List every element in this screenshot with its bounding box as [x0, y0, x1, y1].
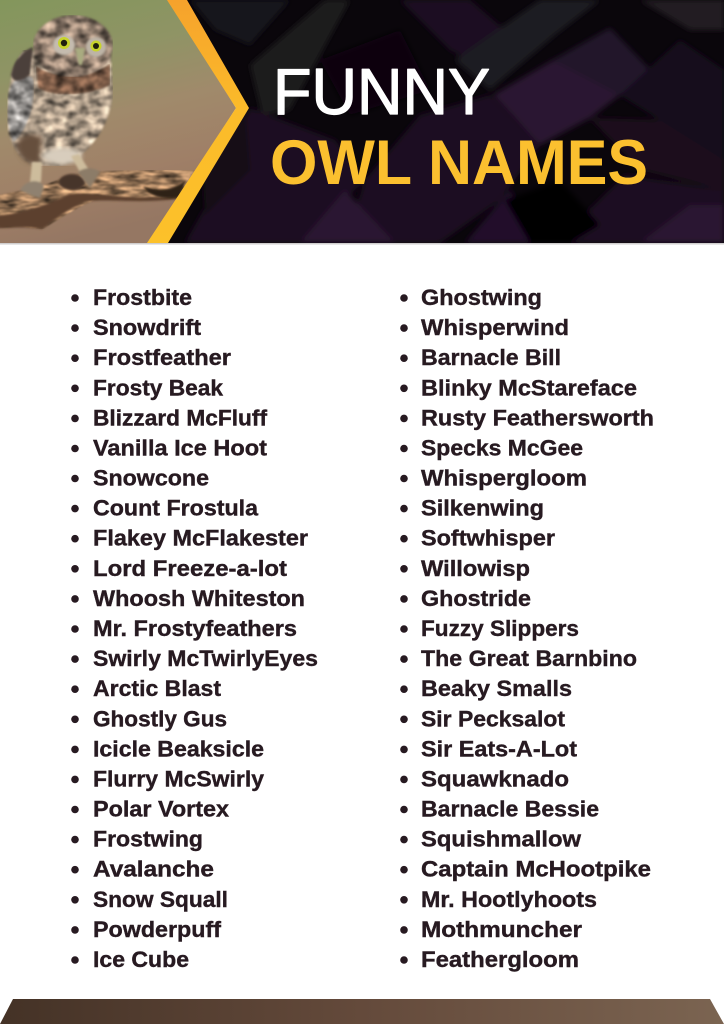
- name: Frostbite: Frostbite: [93, 285, 192, 310]
- header bottom edge: [0, 243, 724, 244]
- name: Ghostwing: Ghostwing: [421, 285, 542, 310]
- name: Blizzard McFluff: Blizzard McFluff: [93, 405, 268, 430]
- name: Flakey McFlakester: Flakey McFlakester: [93, 526, 308, 551]
- name: Ghostride: Ghostride: [421, 586, 531, 611]
- name: Silkenwing: Silkenwing: [421, 496, 544, 521]
- icon: branch: [0, 170, 195, 229]
- name: Swirly McTwirlyEyes: Swirly McTwirlyEyes: [93, 646, 318, 671]
- name: Count Frostula: Count Frostula: [93, 496, 259, 521]
- owl legs and feet: [20, 154, 100, 198]
- name: Captain McHootpike: Captain McHootpike: [421, 857, 651, 882]
- name: Sir Eats-A-Lot: Sir Eats-A-Lot: [421, 736, 578, 761]
- name: Whoosh Whiteston: Whoosh Whiteston: [93, 586, 305, 611]
- name: Beaky Smalls: Beaky Smalls: [421, 676, 572, 701]
- name: Polar Vortex: Polar Vortex: [93, 796, 229, 822]
- name: Barnacle Bessie: Barnacle Bessie: [421, 796, 599, 822]
- name: Rusty Feathersworth: Rusty Feathersworth: [421, 405, 654, 430]
- name: Squishmallow: Squishmallow: [421, 827, 582, 852]
- name: Blinky McStareface: Blinky McStareface: [421, 375, 637, 400]
- name: Feathergloom: Feathergloom: [421, 947, 579, 972]
- name: Mr. Hootlyhoots: Mr. Hootlyhoots: [421, 887, 597, 912]
- name: Whisperwind: Whisperwind: [421, 315, 569, 340]
- name: The Great Barnbino: The Great Barnbino: [421, 646, 637, 671]
- name: Mothmuncher: Mothmuncher: [421, 917, 582, 942]
- name: Willowisp: Willowisp: [421, 556, 530, 581]
- list: right column of names: [400, 285, 654, 972]
- name: Icicle Beaksicle: Icicle Beaksicle: [93, 736, 264, 761]
- photo: owl on branch: [0, 0, 240, 243]
- name: Flurry McSwirly: Flurry McSwirly: [93, 766, 264, 791]
- name: Vanilla Ice Hoot: Vanilla Ice Hoot: [93, 436, 268, 460]
- name: Whispergloom: Whispergloom: [421, 466, 587, 490]
- name: Snowdrift: Snowdrift: [93, 315, 202, 340]
- heading: OWL NAMES: OWL NAMES: [270, 128, 648, 198]
- name: Avalanche: Avalanche: [93, 857, 214, 882]
- name: Squawknado: Squawknado: [421, 766, 569, 791]
- name: Snow Squall: Snow Squall: [93, 887, 228, 912]
- name: Ghostly Gus: Ghostly Gus: [93, 706, 227, 731]
- list: left column of names: [71, 285, 318, 972]
- name: Lord Freeze-a-lot: Lord Freeze-a-lot: [93, 556, 288, 581]
- name: Barnacle Bill: Barnacle Bill: [421, 345, 561, 370]
- owl beak: [75, 48, 85, 65]
- heading: FUNNY: FUNNY: [273, 55, 490, 128]
- name: Frosty Beak: Frosty Beak: [93, 375, 223, 400]
- icon: owl: [7, 15, 113, 198]
- panel: dark faceted background: [150, 0, 724, 243]
- owl wing: [8, 75, 34, 142]
- footer band: [0, 999, 724, 1024]
- name: Powderpuff: Powderpuff: [93, 917, 222, 942]
- name: Mr. Frostyfeathers: Mr. Frostyfeathers: [93, 616, 297, 641]
- owl bib: [36, 64, 110, 94]
- name: Frostwing: Frostwing: [93, 827, 203, 852]
- name: Snowcone: Snowcone: [93, 466, 209, 490]
- name: Sir Pecksalot: Sir Pecksalot: [421, 706, 566, 731]
- icon: yellow chevron: [147, 0, 249, 243]
- owl eyes: [58, 37, 102, 52]
- owl body: [7, 50, 113, 166]
- name: Arctic Blast: Arctic Blast: [93, 676, 222, 701]
- owl head: [33, 15, 113, 77]
- name: Softwhisper: Softwhisper: [421, 526, 555, 551]
- name: Frostfeather: Frostfeather: [93, 345, 231, 370]
- name: Ice Cube: Ice Cube: [93, 947, 189, 972]
- header banner: [0, 0, 724, 243]
- name: Specks McGee: Specks McGee: [421, 436, 583, 460]
- name: Fuzzy Slippers: Fuzzy Slippers: [421, 616, 579, 641]
